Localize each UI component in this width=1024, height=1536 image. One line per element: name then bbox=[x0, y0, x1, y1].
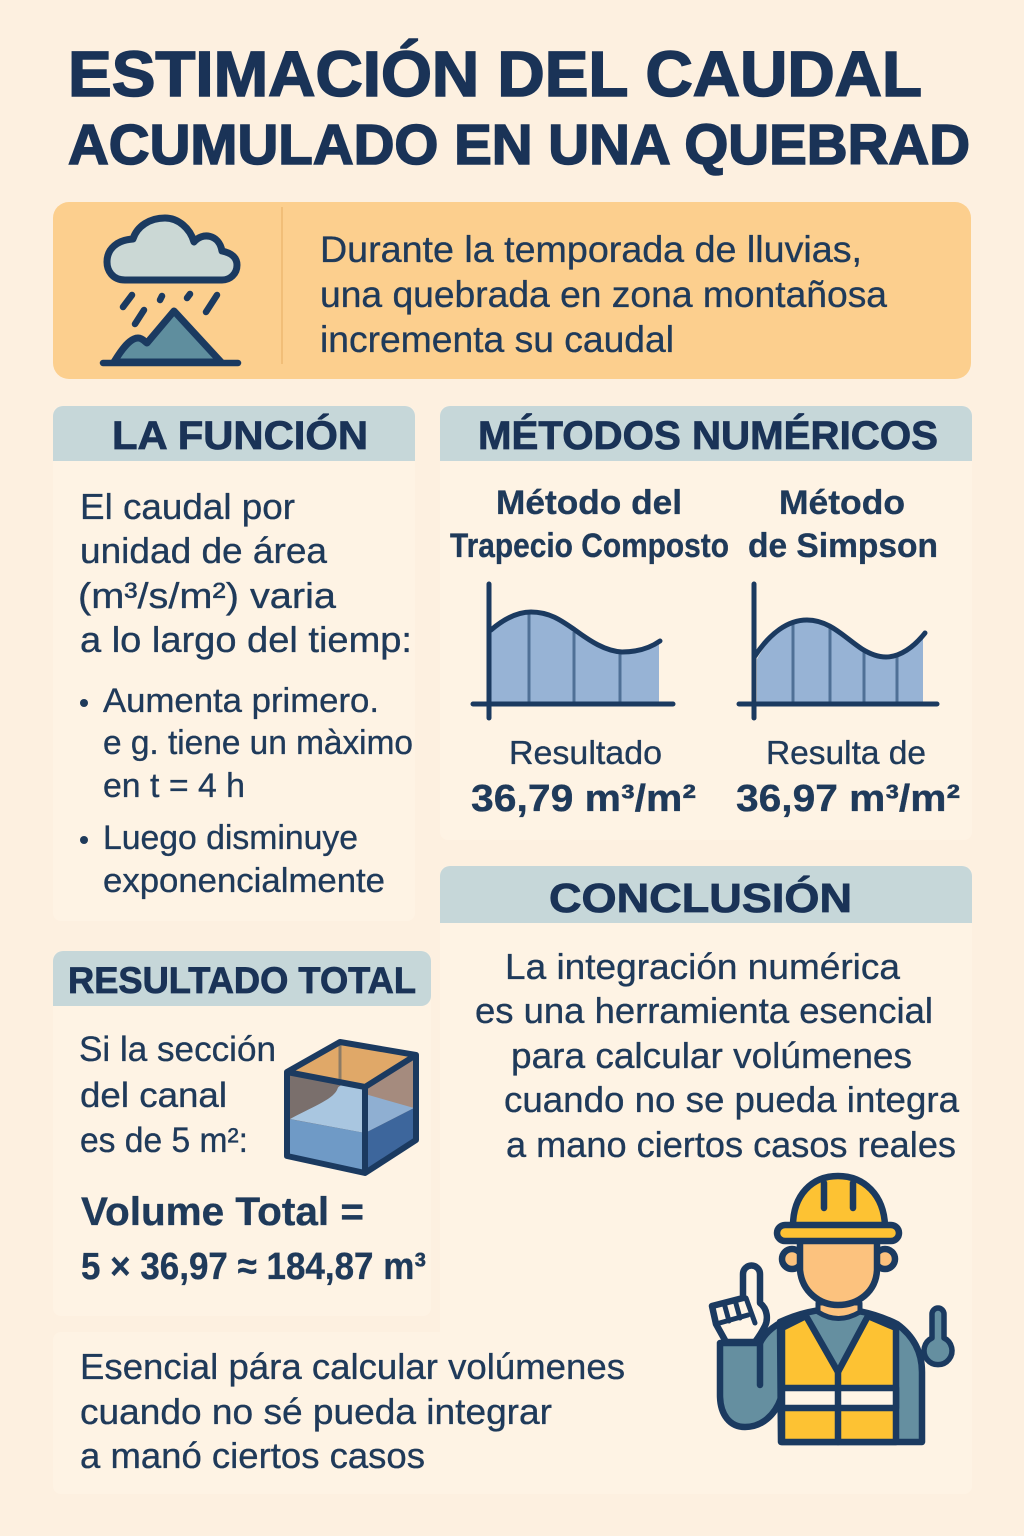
result: trapecio bbox=[471, 734, 696, 820]
panel: resultado total bbox=[53, 951, 431, 1316]
heading: conclusión: CONCLUSIÓN bbox=[549, 875, 852, 921]
closing text bbox=[80, 1346, 625, 1476]
panel: closing note bbox=[53, 1332, 972, 1494]
method: simpson bbox=[736, 484, 960, 820]
conclusion text: La integración numérica bbox=[505, 946, 901, 987]
conclusion text: es una herramienta esencial bbox=[475, 990, 933, 1031]
result: trapecio: 36,79 m³/m² bbox=[471, 778, 696, 820]
heading: resultado total: RESULTADO TOTAL bbox=[68, 960, 416, 1001]
bullet list: Aumenta primero. bbox=[103, 682, 379, 720]
intro text: una quebrada en zona montañosa bbox=[320, 274, 887, 315]
conclusion text: para calcular volúmenes bbox=[511, 1035, 912, 1076]
section text: Si la sección bbox=[79, 1030, 276, 1069]
worker body and vest bbox=[720, 1309, 922, 1442]
pointing hand bbox=[712, 1266, 767, 1342]
section text bbox=[79, 1030, 276, 1160]
bullet list: en t = 4 h bbox=[103, 767, 245, 805]
heading: la función: LA FUNCIÓN bbox=[112, 412, 368, 458]
function description bbox=[78, 486, 412, 660]
total volume formula: Volume Total = bbox=[81, 1190, 364, 1234]
function description: unidad de área bbox=[80, 530, 328, 571]
panel: conclusión bbox=[440, 866, 972, 1494]
result: trapecio: Resultado bbox=[509, 734, 662, 771]
function description: El caudal por bbox=[80, 486, 295, 527]
title: ACUMULADO EN UNA QUEBRAD bbox=[68, 113, 970, 177]
total volume formula bbox=[81, 1190, 426, 1288]
total volume formula: 5 × 36,97 ≈ 184,87 m³ bbox=[81, 1246, 426, 1288]
conclusion text: a mano ciertos casos reales bbox=[506, 1124, 956, 1165]
icon: rain cloud over mountain bbox=[103, 218, 238, 363]
chart: trapecio bbox=[473, 584, 673, 718]
function description: (m³/s/m²) varia bbox=[78, 575, 337, 616]
section text: es de 5 m²: bbox=[80, 1121, 248, 1160]
conclusion text bbox=[475, 946, 960, 1165]
section text: del canal bbox=[80, 1076, 227, 1115]
bullet list: Luego disminuye bbox=[103, 819, 358, 857]
panel: la función bbox=[53, 406, 415, 921]
worker head bbox=[782, 1240, 895, 1318]
icon: engineer with hard hat bbox=[712, 1176, 952, 1442]
icon: water cube bbox=[287, 1042, 416, 1173]
panel: métodos numéricos bbox=[440, 406, 972, 840]
chart: simpson bbox=[739, 584, 937, 718]
method: trapecio compuesto: Método del bbox=[496, 484, 682, 522]
result: simpson bbox=[736, 734, 960, 820]
thermometer bbox=[924, 1308, 952, 1365]
method: simpson: de Simpson bbox=[748, 527, 938, 565]
title: ESTIMACIÓN DEL CAUDAL bbox=[68, 38, 922, 110]
bullet list: exponencialmente bbox=[103, 862, 385, 900]
method: trapecio compuesto: Trapecio Composto bbox=[450, 527, 729, 565]
panel: intro banner bbox=[53, 202, 971, 379]
title bbox=[68, 38, 970, 177]
function description: a lo largo del tiemp: bbox=[80, 619, 412, 660]
intro text: incrementa su caudal bbox=[320, 319, 674, 360]
heading: métodos numéricos: MÉTODOS NUMÉRICOS bbox=[478, 413, 938, 458]
method: simpson: Método bbox=[779, 484, 905, 522]
hard hat bbox=[777, 1176, 899, 1241]
result: simpson: 36,97 m³/m² bbox=[736, 778, 960, 820]
bullet list: e g. tiene un màximo bbox=[103, 724, 413, 762]
closing text: cuando no sé pueda integrar bbox=[80, 1391, 552, 1432]
intro text bbox=[320, 229, 887, 360]
method: trapecio compuesto bbox=[450, 484, 729, 820]
conclusion text: cuando no se pueda integra bbox=[504, 1079, 960, 1120]
result: simpson: Resulta de bbox=[766, 734, 926, 771]
closing text: Esencial pára calcular volúmenes bbox=[80, 1346, 625, 1387]
bullet list bbox=[80, 682, 413, 900]
intro text: Durante la temporada de lluvias, bbox=[320, 229, 862, 270]
closing text: a manó ciertos casos bbox=[80, 1435, 425, 1476]
